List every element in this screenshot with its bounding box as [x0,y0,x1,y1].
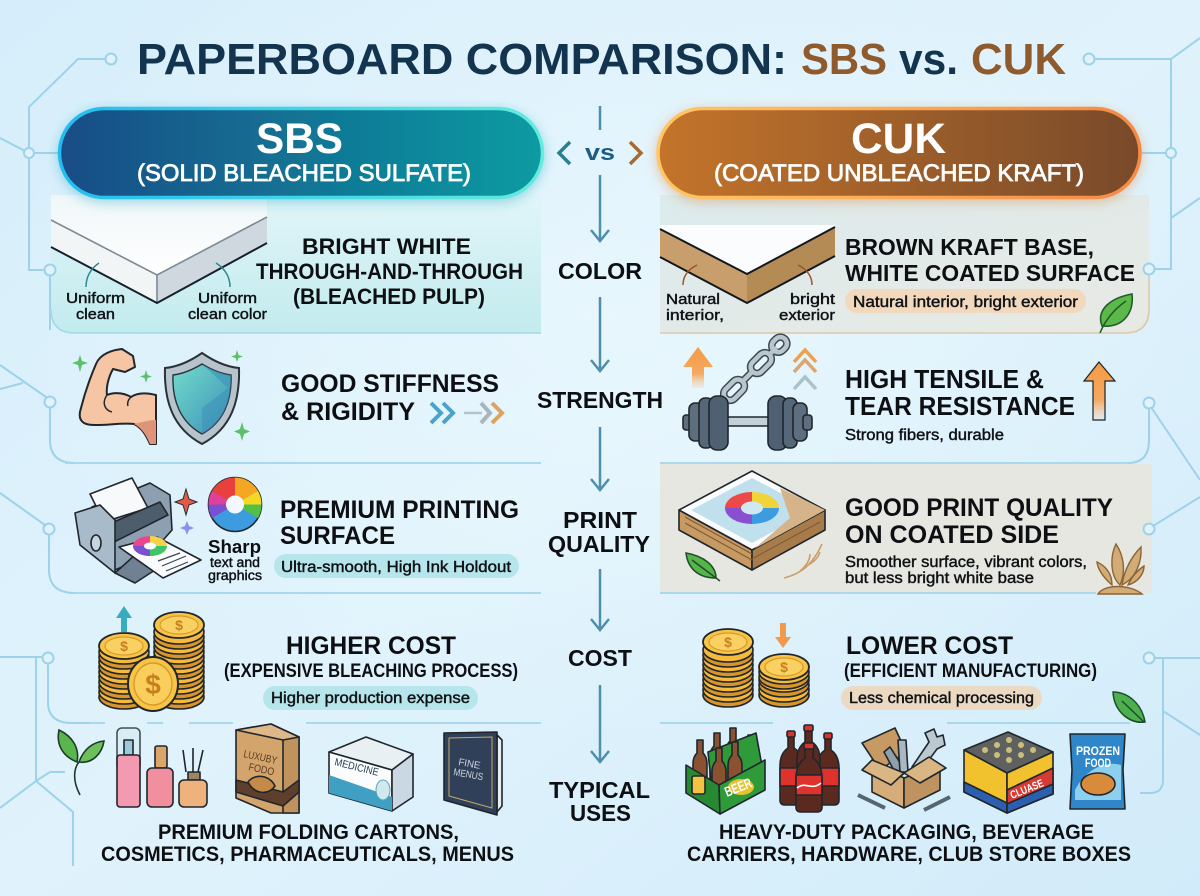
text: good print quality: GOOD PRINT QUALITY [845,494,1113,522]
text: premium printing: SURFACE [280,522,395,550]
panel: SBS typical uses [58,724,514,866]
title: vs. [899,35,958,84]
icon: kraft board sample: Natural [666,291,720,308]
icon: coated board [679,471,825,570]
icon: sparkles [72,350,250,441]
icon: dumbbell [683,396,812,450]
text: high tensile: Strong fibers, durable [845,427,1004,444]
pill: less chemical processing: Less chemical processing [849,690,1034,707]
text: good print quality: Smoother surface, vibrant colors, [845,554,1087,571]
icon: fine menus: MENUS [452,767,484,783]
text: SBS color description: (BLEACHED PULP) [293,284,485,309]
icon: coin stacks [703,629,809,707]
label: typical uses [549,777,650,826]
panel: SBS print [75,477,541,593]
text: SBS color description: THROUGH-AND-THROUGH [256,259,523,284]
text: good print quality: but less bright white base [845,570,1034,587]
icon: fiber twig [784,544,822,578]
icon: up chevrons [794,350,816,389]
icon: fine menus: FINE [457,757,481,772]
header: SBS: (SOLID BLEACHED SULFATE) [137,160,471,187]
text: CUK uses: HEAVY-DUTY PACKAGING, BEVERAGE [719,820,1094,844]
title: PAPERBOARD COMPARISON: [137,35,787,84]
icon: fine menus [444,732,502,815]
header: SBS [60,108,542,198]
text: CUK uses: CARRIERS, HARDWARE, CLUB STORE BOXES [687,842,1131,866]
panel: SBS color [51,195,541,333]
title: SBS [801,35,887,84]
text: high tensile: TEAR RESISTANCE [845,391,1075,421]
icon: orange down arrow [775,623,791,648]
text: higher cost [224,632,518,682]
icon: leaf [1100,294,1132,333]
panel: CUK cost [660,623,1145,723]
icon: hardware box [858,728,950,810]
text: sharp text and graphics: text and [210,555,260,570]
icon: beer carrier [686,728,765,814]
icon: leaf [1113,692,1145,722]
icon: club store box: CLUASE [1009,778,1046,802]
panel: CUK typical uses [686,725,1131,866]
panel: CUK print [660,464,1152,594]
header: SBS: SBS [256,115,343,163]
pill: natural interior [845,289,1086,313]
icon: sparkles [175,489,197,535]
text: lower cost: LOWER COST [846,632,1013,660]
pill: less chemical processing [841,686,1042,710]
icon: white board sample: Uniform [66,290,125,307]
icon: plant [1097,544,1144,594]
icon: shield [165,353,239,444]
icon: kraft board sample: bright [790,291,836,308]
text: SBS uses [101,820,514,866]
icon: beer carrier: BEER [722,774,754,800]
panel: SBS cost [90,606,541,723]
icon: coin stacks: $ [145,669,161,700]
icon: kraft board sample: interior, [666,307,724,324]
text: premium printing [280,496,519,550]
text: SBS uses: PREMIUM FOLDING CARTONS, [158,820,459,844]
text: premium printing: PREMIUM PRINTING [280,496,519,524]
icon: color wheel [208,477,262,532]
icon: frozen food bag: PROZEN [1076,746,1120,758]
icon: medicine box [329,737,413,811]
icon: small up arrow [683,347,713,388]
vs connector [559,106,641,165]
icon: luxury food box: LUXUBY [242,748,278,767]
title [137,35,1066,84]
icon: club store box [964,732,1053,813]
icon: printer [75,478,201,583]
text: CUK color description [845,234,1135,286]
text: high tensile: HIGH TENSILE & [845,364,1044,394]
text: high tensile [845,364,1075,444]
pill: natural interior: Natural interior, bright exterior [853,294,1078,311]
icon: coin stacks: $ [724,634,732,650]
text: CUK color description: BROWN KRAFT BASE, [845,234,1094,260]
text: good print quality [845,494,1113,587]
icon: coin stacks: $ [780,659,788,675]
icon: coin stacks: $ [120,638,128,654]
pill: ultra-smooth [274,554,519,578]
text: sharp text and graphics [208,537,262,583]
arrow: to color [591,175,609,241]
arrow: to print quality [591,427,609,490]
icon: white board sample: clean [76,306,115,323]
icon: kraft board sample: exterior [779,307,835,324]
icon: kraft board sample [660,225,836,324]
text: good print quality: ON COATED SIDE [845,521,1059,549]
text: sharp text and graphics: graphics [208,568,262,583]
icon: luxury food box: FODO [247,761,275,778]
icon: frozen food bag: FOOD [1085,758,1111,770]
text: SBS color description: BRIGHT WHITE [302,234,471,259]
label: print quality: QUALITY [548,531,650,557]
text: SBS color description [256,234,523,309]
icon: white board sample: Uniform [198,290,257,307]
icon: sprout [58,730,104,795]
pill: ultra-smooth: Ultra-smooth, High Ink Holdout [281,559,512,576]
icon: cosmetics [117,728,207,807]
label: color: COLOR [558,258,642,284]
text: SBS uses: COSMETICS, PHARMACEUTICALS, MENUS [101,842,514,866]
vs connector: vs [585,140,615,165]
icon: chain [721,334,790,403]
arrow: to typical uses [591,685,609,762]
icon: frozen food bag [1070,734,1125,809]
header: CUK: CUK [851,115,946,163]
icon: luxury food box [236,724,299,813]
icon: chevrons [431,403,502,423]
arrow: to cost [591,569,609,630]
title: CUK [971,35,1066,84]
text: good stiffness [281,370,499,426]
panel: CUK strength [660,334,1130,463]
icon: white board sample [51,195,267,323]
text: higher cost: HIGHER COST [286,632,456,660]
header: CUK [658,108,1140,198]
center column labels and arrows [537,175,663,826]
icon: cola bottles [780,725,839,812]
arrow: to strength [591,297,609,371]
pill: higher production expense [263,686,478,710]
text: CUK uses [687,820,1131,866]
icon: teal up arrow [116,606,132,632]
header: CUK: (COATED UNBLEACHED KRAFT) [714,160,1084,187]
text: higher cost: (EXPENSIVE BLEACHING PROCESS) [224,661,518,682]
icon: coin stacks [99,612,204,711]
label: typical uses: TYPICAL [549,777,650,803]
text: CUK color description: WHITE COATED SURFACE [845,260,1135,286]
text: lower cost [844,632,1097,682]
icon: medicine box: MEDICINE [333,756,380,779]
panel: SBS strength [65,349,541,463]
label: typical uses: USES [570,800,631,826]
text: good stiffness: & RIGIDITY [281,398,415,426]
icon: white board sample: clean color [188,306,267,323]
icon: large up arrow [1084,362,1115,420]
label: print quality: PRINT [563,507,637,533]
label: cost: COST [568,645,632,671]
text: sharp text and graphics: Sharp [208,537,261,557]
icon: leaf [686,553,720,581]
icon: coin stacks: $ [175,617,183,633]
pill: higher production expense: Higher production expense [271,690,470,707]
text: lower cost: (EFFICIENT MANUFACTURING) [844,661,1097,682]
panel: CUK color [660,195,1149,333]
label: print quality [548,507,650,557]
icon: flexed arm [80,349,156,444]
text: good stiffness: GOOD STIFFNESS [281,370,499,398]
label: strength: STRENGTH [537,387,663,413]
